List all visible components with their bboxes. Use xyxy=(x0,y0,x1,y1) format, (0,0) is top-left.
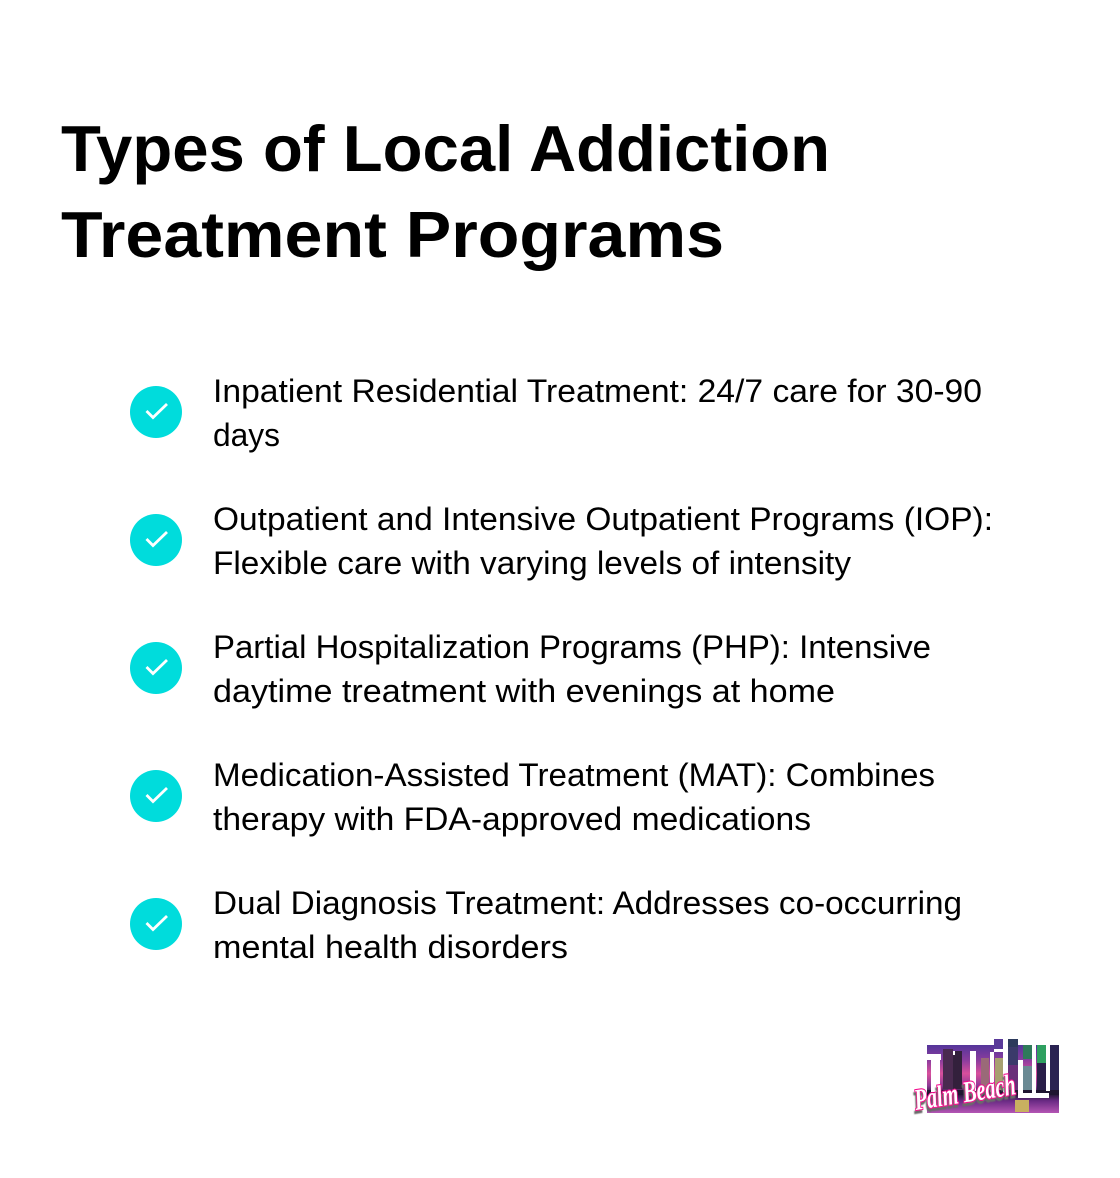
title: Treatment Programs xyxy=(61,198,724,271)
checklist xyxy=(130,373,993,965)
item text: days xyxy=(213,417,280,453)
item text xyxy=(213,885,962,965)
item text xyxy=(213,629,931,709)
title xyxy=(61,112,830,271)
white letter gaps xyxy=(925,1038,1050,1098)
icon: check xyxy=(130,642,182,694)
logo: Amitay Palm Beach xyxy=(911,1038,1059,1117)
item text xyxy=(213,373,982,453)
script: Palm Beach: Palm Beach xyxy=(911,1068,1018,1117)
icon: check xyxy=(130,898,182,950)
icon: check xyxy=(130,770,182,822)
item text xyxy=(213,501,993,581)
item text: Inpatient Residential Treatment: 24/7 care for 30-90 xyxy=(213,373,982,409)
item text: therapy with FDA-approved medications xyxy=(213,801,811,837)
list item: inpatient xyxy=(130,373,982,453)
list item: medication-assisted xyxy=(130,757,935,837)
icon: check xyxy=(130,386,182,438)
item text: Medication-Assisted Treatment (MAT): Combines xyxy=(213,757,935,793)
title: Types of Local Addiction xyxy=(61,112,830,185)
list item: partial hospitalization xyxy=(130,629,931,709)
item text: Dual Diagnosis Treatment: Addresses co-occurring xyxy=(213,885,962,921)
list item: dual diagnosis xyxy=(130,885,962,965)
list item: outpatient xyxy=(130,501,993,581)
item text: Flexible care with varying levels of intensity xyxy=(213,545,851,581)
item text xyxy=(213,757,935,837)
item text: daytime treatment with evenings at home xyxy=(213,673,835,709)
buildings and palms xyxy=(943,1049,953,1089)
item text: mental health disorders xyxy=(213,929,568,965)
item text: Outpatient and Intensive Outpatient Programs (IOP): xyxy=(213,501,993,537)
icon: check xyxy=(130,514,182,566)
item text: Partial Hospitalization Programs (PHP): Intensive xyxy=(213,629,931,665)
